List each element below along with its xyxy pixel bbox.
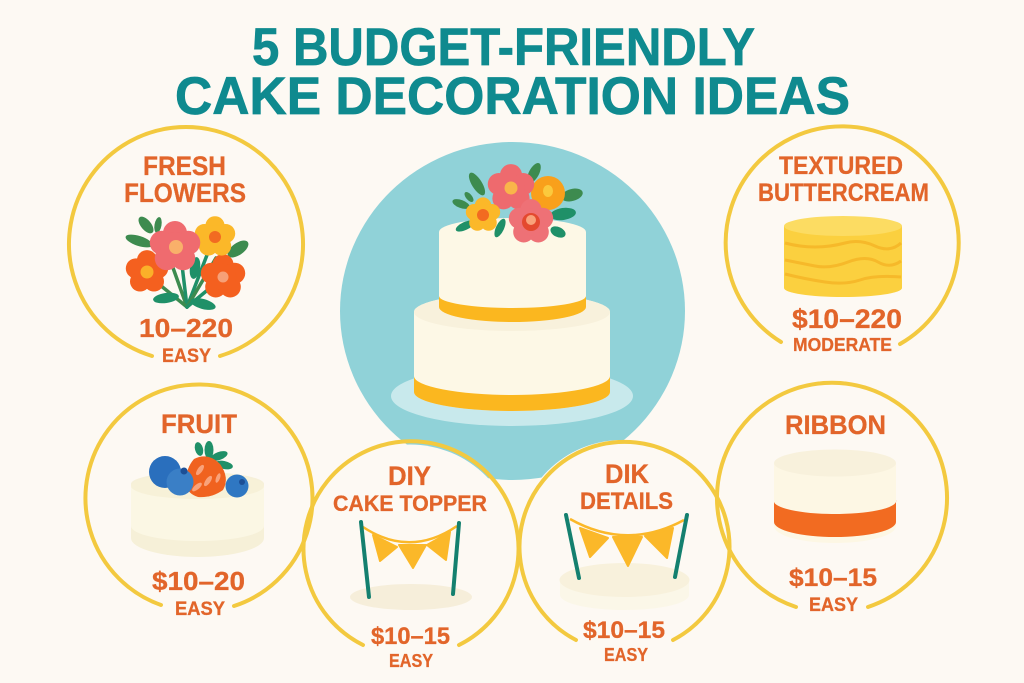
heading: fruit: FRUIT <box>161 409 237 439</box>
price: fruit: $10–20 <box>152 566 245 596</box>
heading: fresh flowers <box>124 151 246 208</box>
icon: bunting cake topper <box>350 522 472 610</box>
central illustration: tiered cake on teal circle <box>340 142 685 480</box>
heading: textured buttercream: BUTTERCREAM <box>758 179 929 207</box>
icon: cake with ribbon <box>774 450 896 543</box>
panel: fruit <box>85 385 312 620</box>
panel: ribbon <box>717 383 947 616</box>
title: CAKE DECORATION IDEAS <box>175 67 850 126</box>
price: textured buttercream: $10–220 <box>792 304 902 334</box>
icon: textured buttercream cake <box>784 216 902 297</box>
panel: DIK details <box>520 442 730 665</box>
title <box>175 18 850 126</box>
heading: DIK details: DIK <box>605 459 649 489</box>
heading: textured buttercream: TEXTURED <box>779 152 903 180</box>
icon: bunting on cake <box>560 515 690 610</box>
heading: fresh flowers: FLOWERS <box>124 178 246 208</box>
difficulty: ribbon: EASY <box>809 595 858 616</box>
price: DIK details: $10–15 <box>583 617 665 644</box>
heading: fresh flowers: FRESH <box>143 151 226 181</box>
price: DIY cake topper: $10–15 <box>371 623 450 650</box>
heading: DIY cake topper: CAKE TOPPER <box>333 491 487 516</box>
panel: fresh flowers <box>69 127 303 367</box>
price: ribbon: $10–15 <box>789 564 877 592</box>
price: fresh flowers: 10–220 <box>139 313 233 343</box>
heading: DIY cake topper: DIY <box>388 461 431 491</box>
heading: DIK details: DETAILS <box>580 488 673 515</box>
icon: flower bouquet <box>124 214 251 312</box>
heading: textured buttercream <box>758 152 929 207</box>
difficulty: DIK details: EASY <box>604 645 648 665</box>
difficulty: fresh flowers: EASY <box>162 346 211 367</box>
heading: ribbon: RIBBON <box>785 410 886 440</box>
difficulty: textured buttercream: MODERATE <box>793 335 892 355</box>
flower topper <box>451 161 584 242</box>
heading: DIK details <box>580 459 673 515</box>
heading: DIY cake topper <box>333 461 487 516</box>
title: 5 BUDGET-FRIENDLY <box>252 18 755 77</box>
panel: DIY cake topper <box>304 441 518 671</box>
icon: cake with berries <box>131 441 264 557</box>
difficulty: fruit: EASY <box>175 599 225 620</box>
difficulty: DIY cake topper: EASY <box>389 651 433 671</box>
panel: textured buttercream <box>726 126 959 355</box>
